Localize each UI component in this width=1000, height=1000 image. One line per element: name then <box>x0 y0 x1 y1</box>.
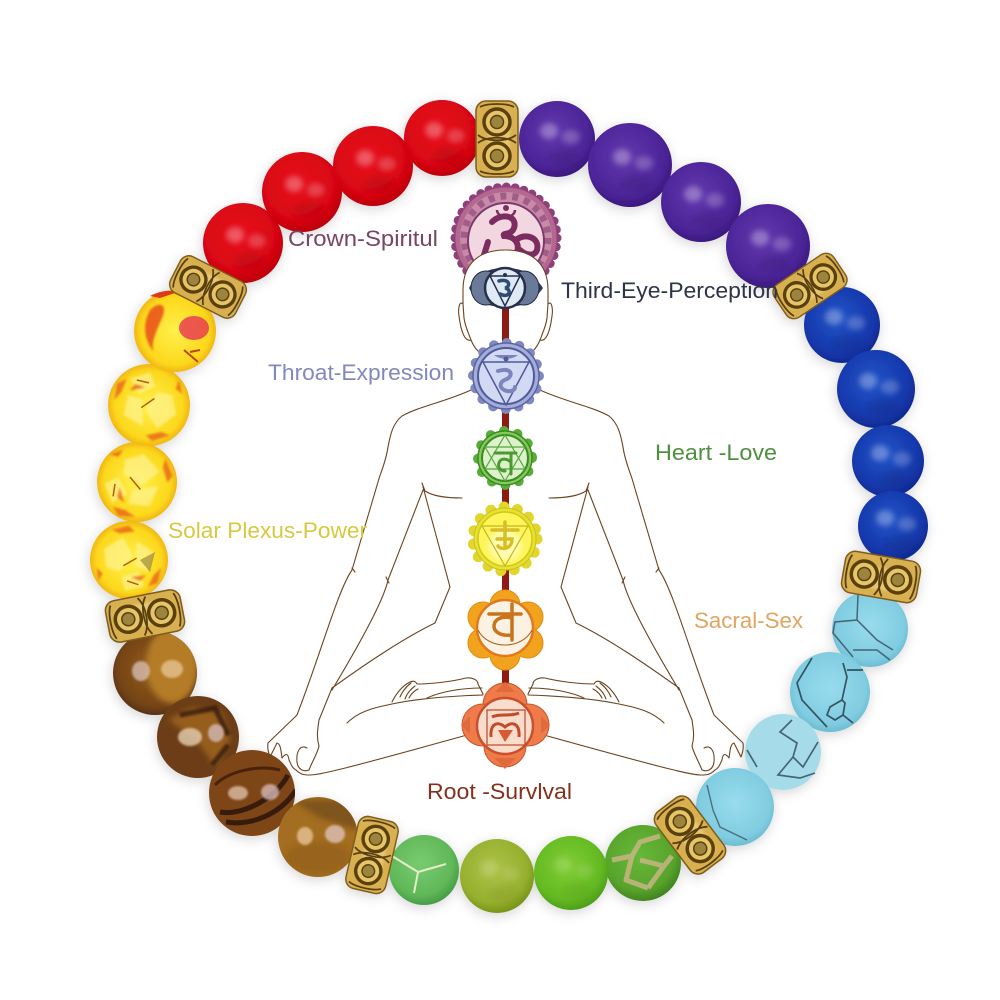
chakra: third eye <box>469 268 543 308</box>
chakra: sacral <box>468 590 543 670</box>
right half <box>506 250 743 775</box>
bracelet <box>90 100 928 913</box>
label: sacral: Sacral-Sex <box>694 608 803 633</box>
gold spacer top <box>476 101 518 177</box>
figure outline <box>268 250 743 775</box>
gold spacer left <box>104 588 186 644</box>
chakra: crown <box>455 187 557 289</box>
gold spacer upper right <box>769 250 851 322</box>
label: throat: Throat-Expression <box>268 360 454 385</box>
gold spacer lower right <box>650 792 730 878</box>
spine <box>502 300 509 700</box>
blue beads: throat <box>804 287 928 561</box>
amber beads: root <box>90 290 216 599</box>
turquoise beads: heart <box>696 591 908 846</box>
label: crown: Crown-Spiritul <box>288 226 438 251</box>
label: solar plexus: Solar Plexus-Power <box>168 518 367 543</box>
left half <box>268 250 505 775</box>
tiger eye beads: sacral <box>113 627 358 877</box>
chakra: solar plexus <box>473 507 537 571</box>
chakra: throat <box>473 343 539 409</box>
gold spacer bottom left <box>344 815 400 895</box>
chakra: root <box>461 682 550 769</box>
chakra: heart <box>478 431 532 485</box>
label: root: Root -Survlval <box>427 779 572 804</box>
red beads: crown <box>203 100 480 283</box>
gold spacer upper left <box>166 252 250 322</box>
label: heart: Heart -Love <box>655 440 777 465</box>
gold spacer right <box>840 550 922 604</box>
label: third eye: Third-Eye-Perception <box>561 278 778 303</box>
green beads: solar <box>389 825 681 913</box>
purple beads: third eye <box>519 101 810 288</box>
head mask <box>463 250 548 342</box>
